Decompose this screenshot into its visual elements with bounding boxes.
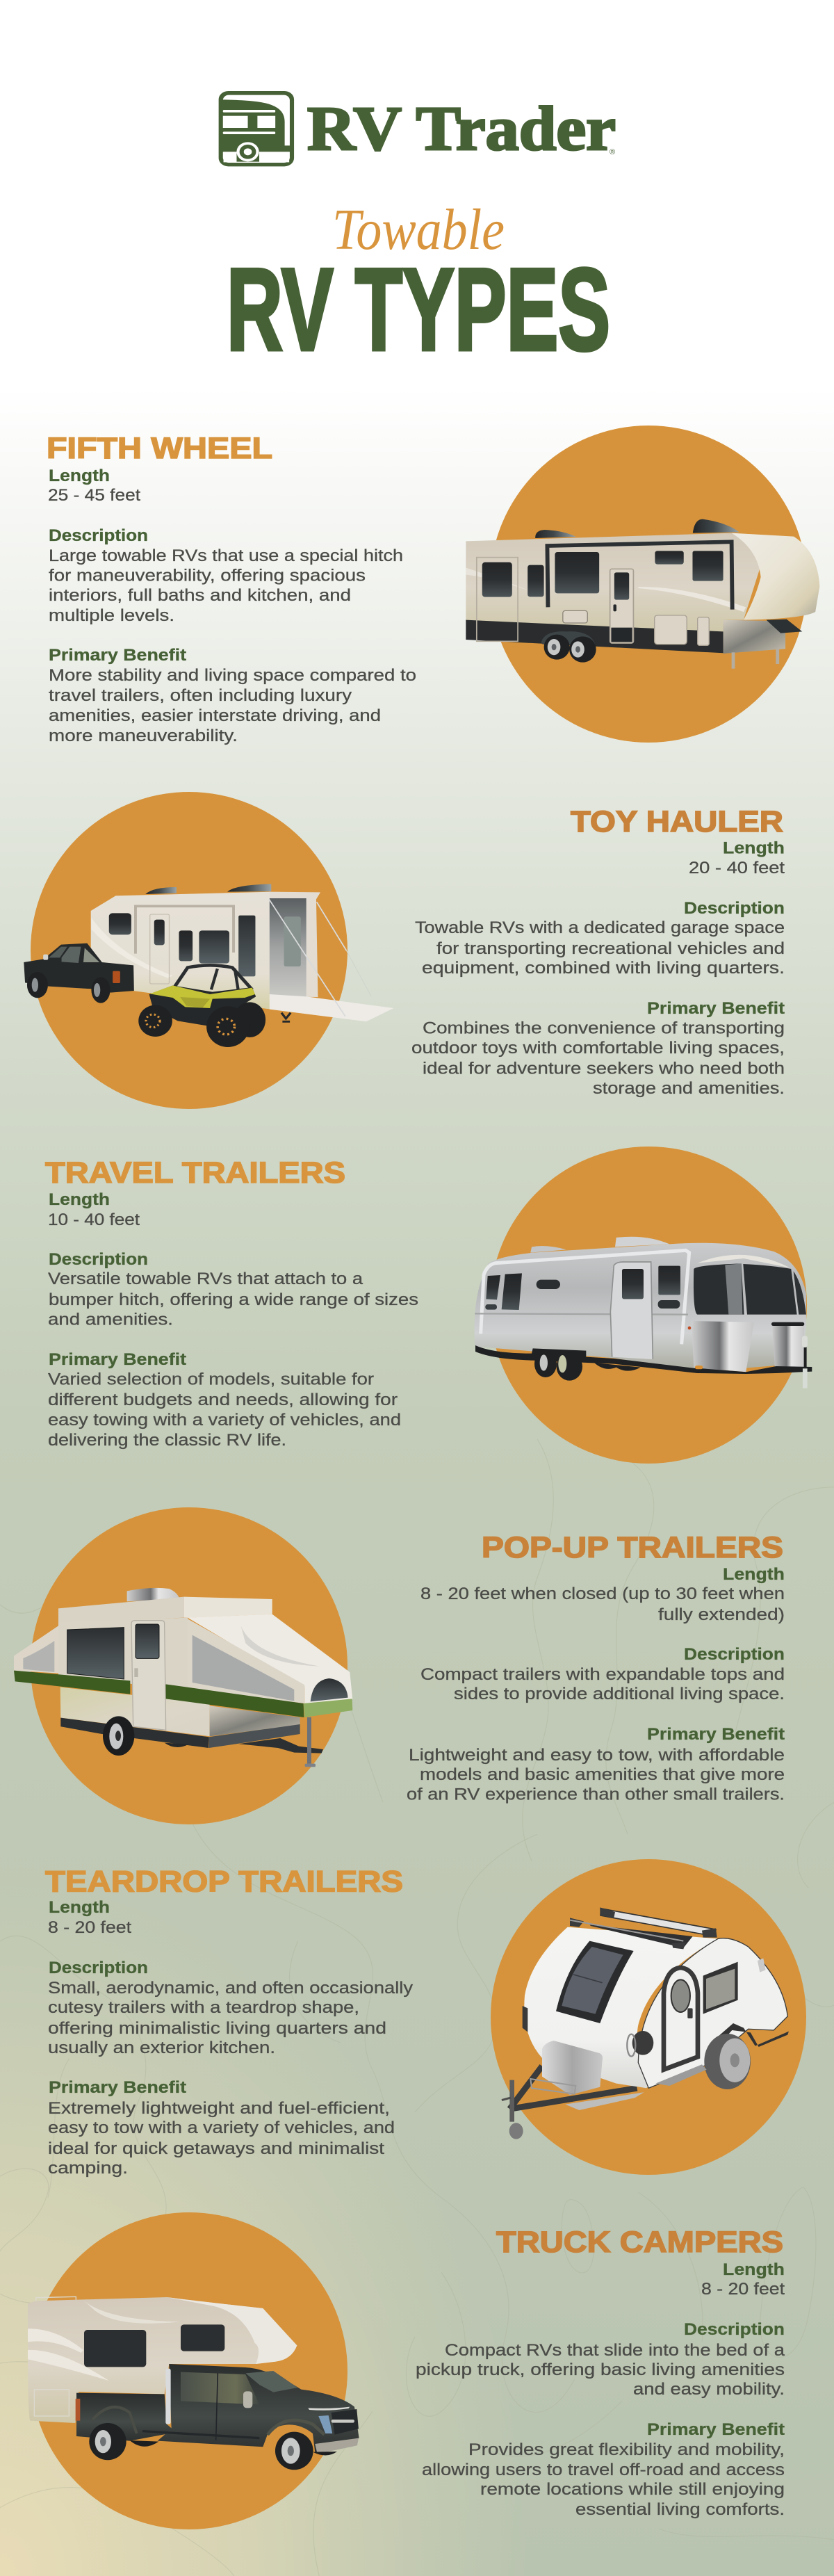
text: fifth wheel: Primary Benefit [49, 646, 186, 665]
text: teardrop trailers: Small, aerodynamic, and often occasionally [48, 1979, 413, 1998]
title script: Towable: Towable [332, 197, 505, 262]
text: fifth wheel: More stability and living space compared to [49, 666, 416, 685]
text: toy hauler: Primary Benefit [647, 999, 785, 1018]
text: toy hauler [411, 805, 785, 1098]
text: travel trailers: Description [49, 1250, 148, 1269]
text: travel trailers [45, 1156, 418, 1450]
text: pop-up trailers: of an RV experience than other small trailers. [407, 1785, 785, 1804]
heading: FIFTH WHEEL [47, 432, 272, 465]
text: pop-up trailers: fully extended) [658, 1605, 785, 1624]
panel: travel trailers [45, 1147, 812, 1464]
panel: truck campers [28, 2212, 785, 2529]
text: fifth wheel [47, 432, 416, 745]
circle [491, 1859, 806, 2175]
text: teardrop trailers: Description [49, 1959, 148, 1977]
heading: POP-UP TRAILERS [482, 1531, 783, 1564]
text: teardrop trailers: offering minimalistic living quarters and [48, 2019, 386, 2038]
text: toy hauler: ideal for adventure seekers who need both [423, 1060, 785, 1078]
logo [219, 91, 616, 166]
text: truck campers: essential living comforts. [575, 2500, 785, 2519]
text: toy hauler: outdoor toys with comfortable living spaces, [411, 1039, 785, 1058]
text: truck campers: 8 - 20 feet [701, 2280, 785, 2299]
text: toy hauler: equipment, combined with living quarters. [422, 959, 785, 978]
registered mark: ® [610, 148, 615, 156]
text: teardrop trailers: ideal for quick getaways and minimalist [48, 2139, 384, 2158]
text: truck campers [416, 2226, 785, 2519]
panel: fifth wheel [47, 426, 819, 745]
text: toy hauler: storage and amenities. [593, 1079, 785, 1098]
illustration: truck camper [28, 2296, 359, 2470]
text: travel trailers: different budgets and needs, allowing for [48, 1391, 398, 1409]
text: teardrop trailers: Primary Benefit [49, 2078, 186, 2097]
text: truck campers: Length [723, 2260, 785, 2279]
circle [31, 792, 348, 1109]
text: truck campers: Primary Benefit [647, 2420, 785, 2439]
text: pop-up trailers [407, 1531, 785, 1804]
text: travel trailers: 10 - 40 feet [48, 1210, 140, 1229]
text: fifth wheel: travel trailers, often including luxury [49, 686, 352, 705]
text: travel trailers: bumper hitch, offering a wide range of sizes [49, 1290, 418, 1309]
text: travel trailers: Length [49, 1190, 110, 1209]
text: teardrop trailers: cutesy trailers with a teardrop shape, [48, 1998, 359, 2017]
illustration: pop-up trailer [14, 1588, 352, 1767]
text: toy hauler: Length [723, 839, 785, 858]
text: truck campers: and easy mobility. [633, 2380, 785, 2399]
background warm corner [0, 1738, 834, 2576]
text: pop-up trailers: Length [723, 1565, 785, 1584]
illustration: teardrop trailer [502, 1907, 789, 2139]
header [219, 91, 616, 375]
text: teardrop trailers: Extremely lightweight and fuel-efficient, [48, 2099, 390, 2118]
text: fifth wheel: multiple levels. [49, 606, 174, 625]
text: fifth wheel: Description [49, 526, 148, 545]
text: pop-up trailers: Description [684, 1645, 785, 1664]
text: teardrop trailers: usually an exterior kitchen. [48, 2039, 275, 2057]
text: pop-up trailers: sides to provide additional living space. [454, 1685, 785, 1703]
text: fifth wheel: Length [49, 467, 110, 485]
text: travel trailers: and amenities. [48, 1310, 173, 1329]
text: fifth wheel: interiors, full baths and kitchen, and [49, 586, 351, 605]
heading: TOY HAULER [571, 805, 783, 839]
panel: teardrop trailers [45, 1859, 806, 2178]
text: truck campers: remote locations while still enjoying [480, 2480, 785, 2499]
heading: TRAVEL TRAILERS [45, 1156, 345, 1190]
text: truck campers: Provides great flexibility and mobility, [468, 2440, 785, 2459]
text: teardrop trailers: 8 - 20 feet [48, 1918, 131, 1937]
heading: TEARDROP TRAILERS [45, 1865, 403, 1898]
text: fifth wheel: 25 - 45 feet [48, 486, 140, 505]
text: pop-up trailers: 8 - 20 feet when closed (up to 30 feet when [420, 1585, 785, 1603]
text: toy hauler: 20 - 40 feet [689, 859, 785, 877]
heading: TRUCK CAMPERS [496, 2226, 783, 2259]
logo icon [219, 91, 294, 166]
illustration: fifth wheel [466, 519, 819, 669]
text: fifth wheel: Large towable RVs that use a special hitch [49, 546, 403, 565]
text: truck campers: Description [684, 2320, 785, 2339]
text: teardrop trailers: easy to tow with a variety of vehicles, and [48, 2119, 395, 2137]
circle [490, 1147, 807, 1464]
text: travel trailers: easy towing with a variety of vehicles, and [48, 1411, 401, 1429]
text: teardrop trailers: camping. [48, 2159, 128, 2178]
circle [31, 2212, 348, 2529]
circle [31, 1507, 348, 1824]
text: travel trailers: delivering the classic RV life. [48, 1431, 286, 1450]
background contour lines [0, 1439, 834, 2576]
text: fifth wheel: more maneuverability. [49, 727, 238, 745]
text: travel trailers: Primary Benefit [49, 1350, 186, 1369]
text: pop-up trailers: models and basic amenities that give more [420, 1765, 785, 1784]
text: pop-up trailers: Lightweight and easy to tow, with affordable [409, 1746, 785, 1765]
text: toy hauler: Description [684, 899, 785, 918]
text: toy hauler: for transporting recreational vehicles and [436, 939, 785, 958]
logo wordmark: RV Trader [307, 95, 616, 163]
text: fifth wheel: for maneuverability, offering spacious [49, 566, 366, 585]
text: truck campers: Compact RVs that slide into the bed of a [445, 2341, 785, 2360]
text: travel trailers: Versatile towable RVs that attach to a [48, 1270, 363, 1288]
illustration: travel trailer [474, 1237, 812, 1388]
title: RV TYPES: RV TYPES [227, 244, 610, 375]
text: toy hauler: Towable RVs with a dedicated garage space [415, 918, 785, 937]
text: travel trailers: Varied selection of models, suitable for [48, 1370, 374, 1389]
text: teardrop trailers: Length [49, 1898, 110, 1917]
panel: pop-up trailers [14, 1507, 785, 1824]
text: fifth wheel: amenities, easier interstate driving, and [49, 706, 381, 725]
text: pop-up trailers: Compact trailers with expandable tops and [420, 1665, 785, 1684]
text: truck campers: pickup truck, offering basic living amenities [416, 2360, 785, 2379]
illustration: toy hauler [24, 884, 393, 1047]
circle [490, 426, 807, 743]
text: teardrop trailers [45, 1865, 413, 2178]
text: pop-up trailers: Primary Benefit [647, 1725, 785, 1744]
text: toy hauler: Combines the convenience of transporting [423, 1019, 785, 1037]
text: truck campers: allowing users to travel off-road and access [422, 2461, 785, 2479]
panel: toy hauler [24, 792, 785, 1109]
